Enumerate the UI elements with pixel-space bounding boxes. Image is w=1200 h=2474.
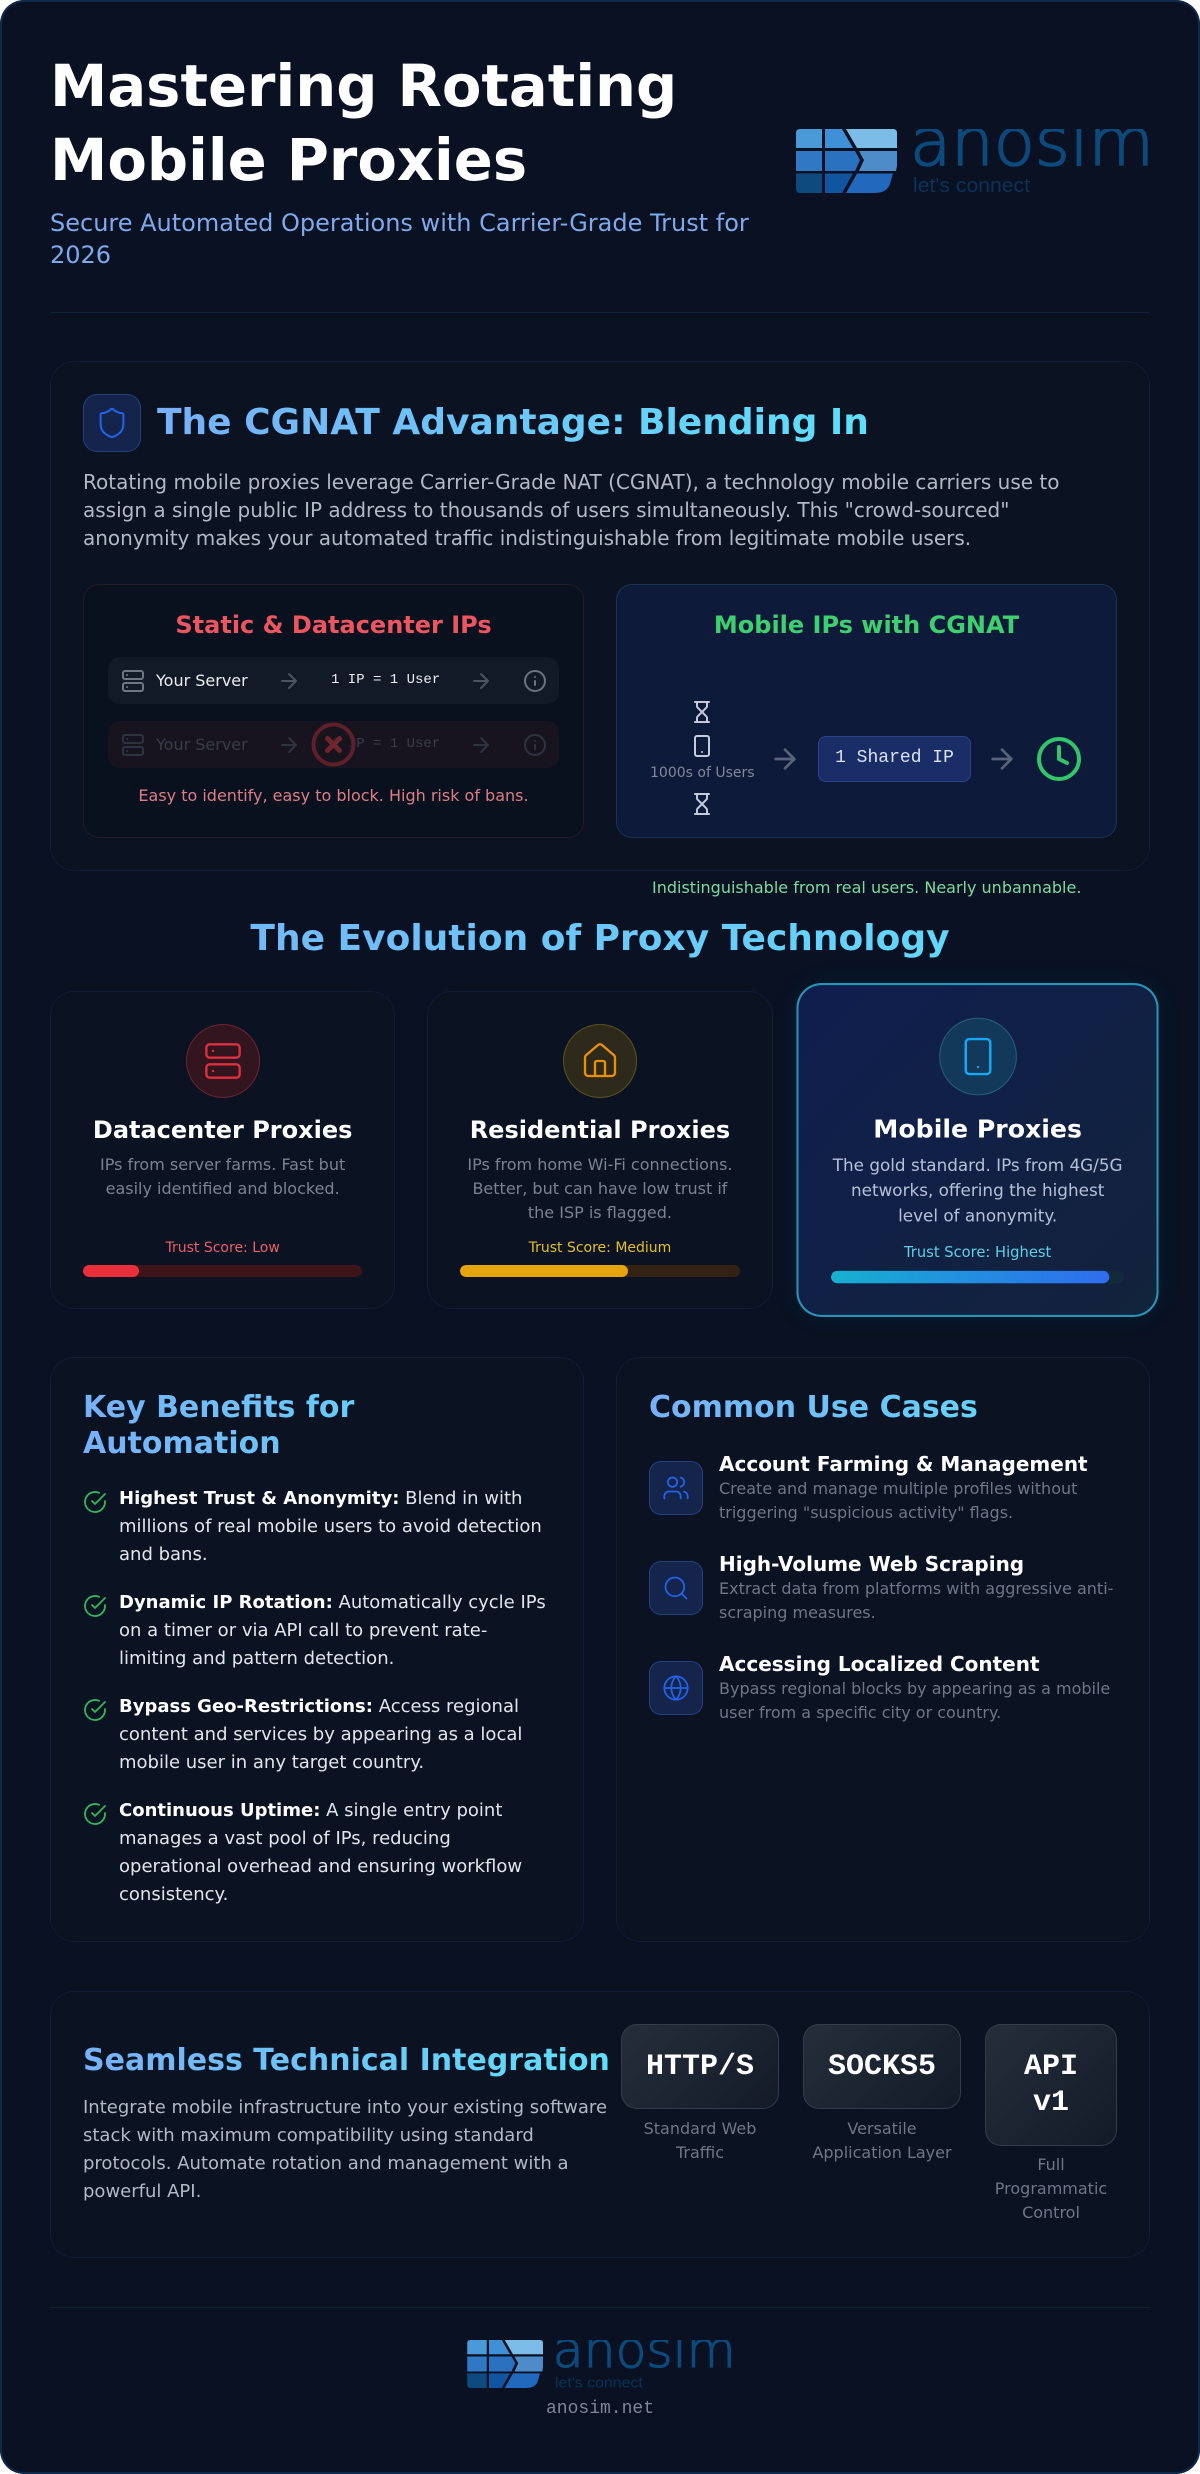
icon: hourglass top <box>694 701 710 723</box>
text: one IP one user: 1 IP = 1 User <box>331 672 440 688</box>
arrow <box>991 748 1013 770</box>
trust score label: Trust Score: Highest <box>904 1244 1051 1261</box>
use case title: Account Farming & Management <box>719 1452 1088 1476</box>
text: CGNAT description: assign a single public IP address to thousands of users simultaneously. This "crowd-sourced" <box>83 498 1009 522</box>
use case text: Extract data from platforms with aggressive anti- <box>719 1579 1113 1598</box>
text: users label: 1000s of Users <box>650 765 755 781</box>
icon: search <box>649 1561 703 1615</box>
text: Highest Trust & Anonymity: Blend in with <box>119 1488 522 1509</box>
use case text: Bypass regional blocks by appearing as a mobile <box>719 1679 1110 1698</box>
benefit: continuous uptime <box>84 1800 522 1905</box>
use case text: triggering "suspicious activity" flags. <box>719 1503 1013 1522</box>
subtitle: Secure Automated Operations with Carrier-Grade Trust for <box>50 209 749 237</box>
protocol: HTTP/S: HTTP/S <box>646 2050 754 2084</box>
protocol: HTTP/S <box>621 2024 779 2109</box>
text <box>467 1155 732 1222</box>
icon: server <box>122 670 144 692</box>
trust bar <box>460 1265 740 1277</box>
arrow <box>774 748 796 770</box>
text: static caption: Easy to identify, easy to block. High risk of bans. <box>138 786 529 805</box>
icon: check <box>84 1491 106 1513</box>
divider: header <box>50 312 1150 313</box>
text: the ISP is flagged. <box>528 1203 672 1222</box>
text: content and services by appearing as a local <box>119 1724 522 1745</box>
caption: Programmatic <box>995 2179 1107 2198</box>
text: IPs from home Wi-Fi connections. <box>467 1155 732 1174</box>
trust bar <box>831 1271 1124 1283</box>
row: blocked server <box>108 721 559 768</box>
benefit: bypass geo restrictions <box>84 1696 522 1773</box>
use case text: scraping measures. <box>719 1603 876 1622</box>
caption: Full <box>1037 2155 1065 2174</box>
panel: technical integration <box>50 1991 1150 2258</box>
text: networks, offering the highest <box>851 1180 1104 1200</box>
caption <box>812 2119 952 2162</box>
text: protocols. Automate rotation and management with a <box>83 2153 569 2174</box>
caption <box>644 2119 756 2162</box>
icon: server dim <box>122 734 144 756</box>
icon: shield <box>83 394 141 452</box>
use case text: user from a specific city or country. <box>719 1703 1001 1722</box>
text: Bypass Geo-Restrictions: Access regional <box>119 1696 519 1717</box>
icon: phone <box>694 735 710 757</box>
heading: Mobile Proxies <box>873 1114 1082 1144</box>
heading: Datacenter Proxies <box>93 1116 352 1144</box>
caption: Versatile <box>847 2119 917 2138</box>
benefit: highest trust <box>84 1488 542 1565</box>
arrow <box>473 673 489 689</box>
text: footer url: anosim.net <box>546 2399 654 2419</box>
text <box>100 1155 345 1198</box>
heading <box>649 1390 1117 1426</box>
text: millions of real mobile users to avoid detection <box>119 1516 542 1537</box>
arrow dim <box>281 737 297 753</box>
logo: anosim footer <box>467 2340 733 2388</box>
heading: Seamless Technical Integration <box>83 2043 610 2078</box>
text: Integrate mobile infrastructure into your existing software <box>83 2097 607 2118</box>
subtitle: 2026 <box>50 241 111 269</box>
text: manages a vast pool of IPs, reducing <box>119 1828 451 1849</box>
heading: Residential Proxies <box>470 1116 730 1144</box>
text: your server: Your Server <box>156 671 248 690</box>
shared IP box: 1 Shared IP <box>835 748 954 768</box>
icon: info <box>524 670 546 692</box>
heading: Common Use Cases <box>649 1390 978 1425</box>
text: consistency. <box>119 1884 228 1905</box>
text <box>119 1696 522 1773</box>
text: powerful API. <box>83 2181 201 2202</box>
title: Mastering Rotating <box>50 53 677 120</box>
text: IPs from server farms. Fast but <box>100 1155 345 1174</box>
use case title: Accessing Localized Content <box>719 1652 1040 1676</box>
panel: CGNAT advantage <box>50 361 1150 871</box>
icon: info dim <box>524 734 546 756</box>
icon: check <box>84 1595 106 1617</box>
text: CGNAT description: anonymity makes your automated traffic indistinguishable from legitimate mobile users. <box>83 526 971 550</box>
text: easily identified and blocked. <box>106 1179 340 1198</box>
icon: clock <box>1037 737 1081 781</box>
panel: static and datacenter IPs <box>83 584 584 838</box>
caption <box>985 2153 1117 2225</box>
icon: server <box>186 1024 260 1098</box>
use case text <box>719 1679 1110 1722</box>
heading <box>83 1390 551 1462</box>
text: one IP dim: 1 IP = 1 User <box>331 736 440 752</box>
text: mobile user in any target country. <box>119 1752 424 1773</box>
row: server to one IP <box>108 657 559 704</box>
card: residential proxies <box>427 991 773 1309</box>
text: and bans. <box>119 1544 208 1565</box>
title <box>50 53 677 194</box>
icon: hourglass bottom <box>694 793 710 815</box>
text: Dynamic IP Rotation: Automatically cycle IPs <box>119 1592 546 1613</box>
panel: mobile IPs with CGNAT <box>616 584 1117 838</box>
benefit: dynamic rotation <box>84 1592 546 1669</box>
subtitle <box>50 209 749 269</box>
logo: anosim header <box>796 129 1150 193</box>
text: stack with maximum compatibility using standard <box>83 2125 534 2146</box>
heading: CGNAT advantage: The CGNAT Advantage: Blending In <box>157 402 869 443</box>
caption: Traffic <box>676 2143 724 2162</box>
icon: users <box>649 1461 703 1515</box>
heading: evolution of proxy technology: The Evolution of Proxy Technology <box>250 918 950 959</box>
text: operational overhead and ensuring workflow <box>119 1856 522 1877</box>
text: on a timer or via API call to prevent rate- <box>119 1620 487 1641</box>
text: limiting and pattern detection. <box>119 1648 394 1669</box>
protocol: SOCKS5: SOCKS5 <box>828 2050 936 2084</box>
icon: globe <box>649 1661 703 1715</box>
use case text <box>719 1579 1113 1622</box>
divider: footer <box>50 2307 1150 2308</box>
icon: check <box>84 1699 106 1721</box>
text <box>832 1155 1122 1226</box>
use case text: Create and manage multiple profiles without <box>719 1479 1077 1498</box>
icon: house <box>563 1024 637 1098</box>
icon: blocked cross <box>312 722 356 766</box>
card: datacenter proxies <box>50 991 395 1309</box>
trust score label: Trust Score: Low <box>165 1240 280 1256</box>
text: level of anonymity. <box>898 1206 1057 1226</box>
heading: Automation <box>83 1426 281 1461</box>
shared IP box <box>818 736 971 782</box>
text: Better, but can have low trust if <box>472 1179 727 1198</box>
trust score label: Trust Score: Medium <box>529 1240 671 1256</box>
text: CGNAT description: Rotating mobile proxies leverage Carrier-Grade NAT (CGNAT), a technology mobile carriers use to <box>83 470 1059 494</box>
arrow dim <box>473 737 489 753</box>
text <box>119 1488 542 1565</box>
use case title: High-Volume Web Scraping <box>719 1552 1024 1576</box>
text <box>119 1800 522 1905</box>
text: Continuous Uptime: A single entry point <box>119 1800 502 1821</box>
use case text <box>719 1479 1077 1522</box>
protocol: API v1: API <box>1024 2050 1078 2084</box>
trust bar <box>83 1265 362 1277</box>
heading: Key Benefits for <box>83 1390 354 1425</box>
text: The gold standard. IPs from 4G/5G <box>832 1155 1122 1175</box>
caption: Standard Web <box>644 2119 756 2138</box>
protocol: SOCKS5 <box>803 2024 961 2109</box>
arrow <box>281 673 297 689</box>
title: Mobile Proxies <box>50 127 527 194</box>
card: mobile proxies <box>796 983 1159 1317</box>
caption: Application Layer <box>812 2143 952 2162</box>
heading: evolution of proxy technology <box>50 914 1150 964</box>
protocol: API v1: v1 <box>1033 2086 1069 2120</box>
text: mobile caption: Indistinguishable from real users. Nearly unbannable. <box>652 878 1081 897</box>
heading: static IPs: Static & Datacenter IPs <box>175 611 492 639</box>
text <box>119 1592 546 1669</box>
icon: check <box>84 1803 106 1825</box>
text <box>83 2097 607 2202</box>
text: CGNAT description <box>83 470 1059 550</box>
heading: mobile IPs: Mobile IPs with CGNAT <box>714 611 1019 639</box>
panel: common use cases <box>616 1357 1150 1942</box>
protocol: API v1 <box>985 2024 1117 2146</box>
panel: key benefits <box>50 1357 584 1942</box>
icon: phone <box>938 1018 1016 1095</box>
caption: Control <box>1022 2203 1080 2222</box>
text: your server dim: Your Server <box>156 735 248 754</box>
